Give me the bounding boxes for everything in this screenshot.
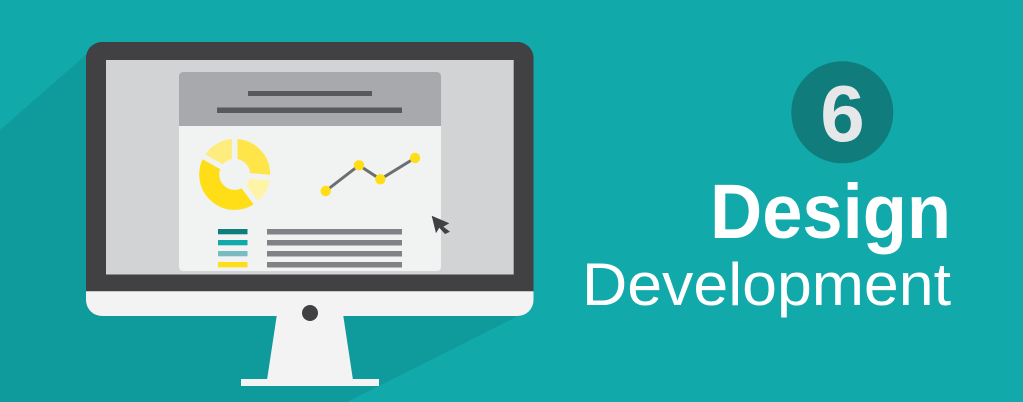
badge circle xyxy=(791,61,893,163)
line chart xyxy=(320,153,420,196)
power button xyxy=(302,305,318,321)
donut chart xyxy=(199,134,275,207)
legend text lines xyxy=(267,229,402,268)
legend swatches xyxy=(218,229,248,267)
monitor bezel xyxy=(86,42,534,291)
monitor chin xyxy=(86,285,534,316)
heading: Development: Development xyxy=(582,251,951,318)
page header xyxy=(179,72,441,126)
monitor stand xyxy=(241,314,379,386)
icon: mouse cursor xyxy=(432,216,450,234)
number badge xyxy=(791,61,893,163)
header title lines xyxy=(217,91,402,113)
monitor screen xyxy=(106,60,514,274)
heading: Design: Design xyxy=(710,169,951,255)
icon: desktop monitor xyxy=(86,42,534,386)
page body xyxy=(179,72,441,271)
panel: report page xyxy=(179,72,450,271)
monitor long shadow xyxy=(0,53,530,402)
step number: 6 xyxy=(820,69,865,158)
